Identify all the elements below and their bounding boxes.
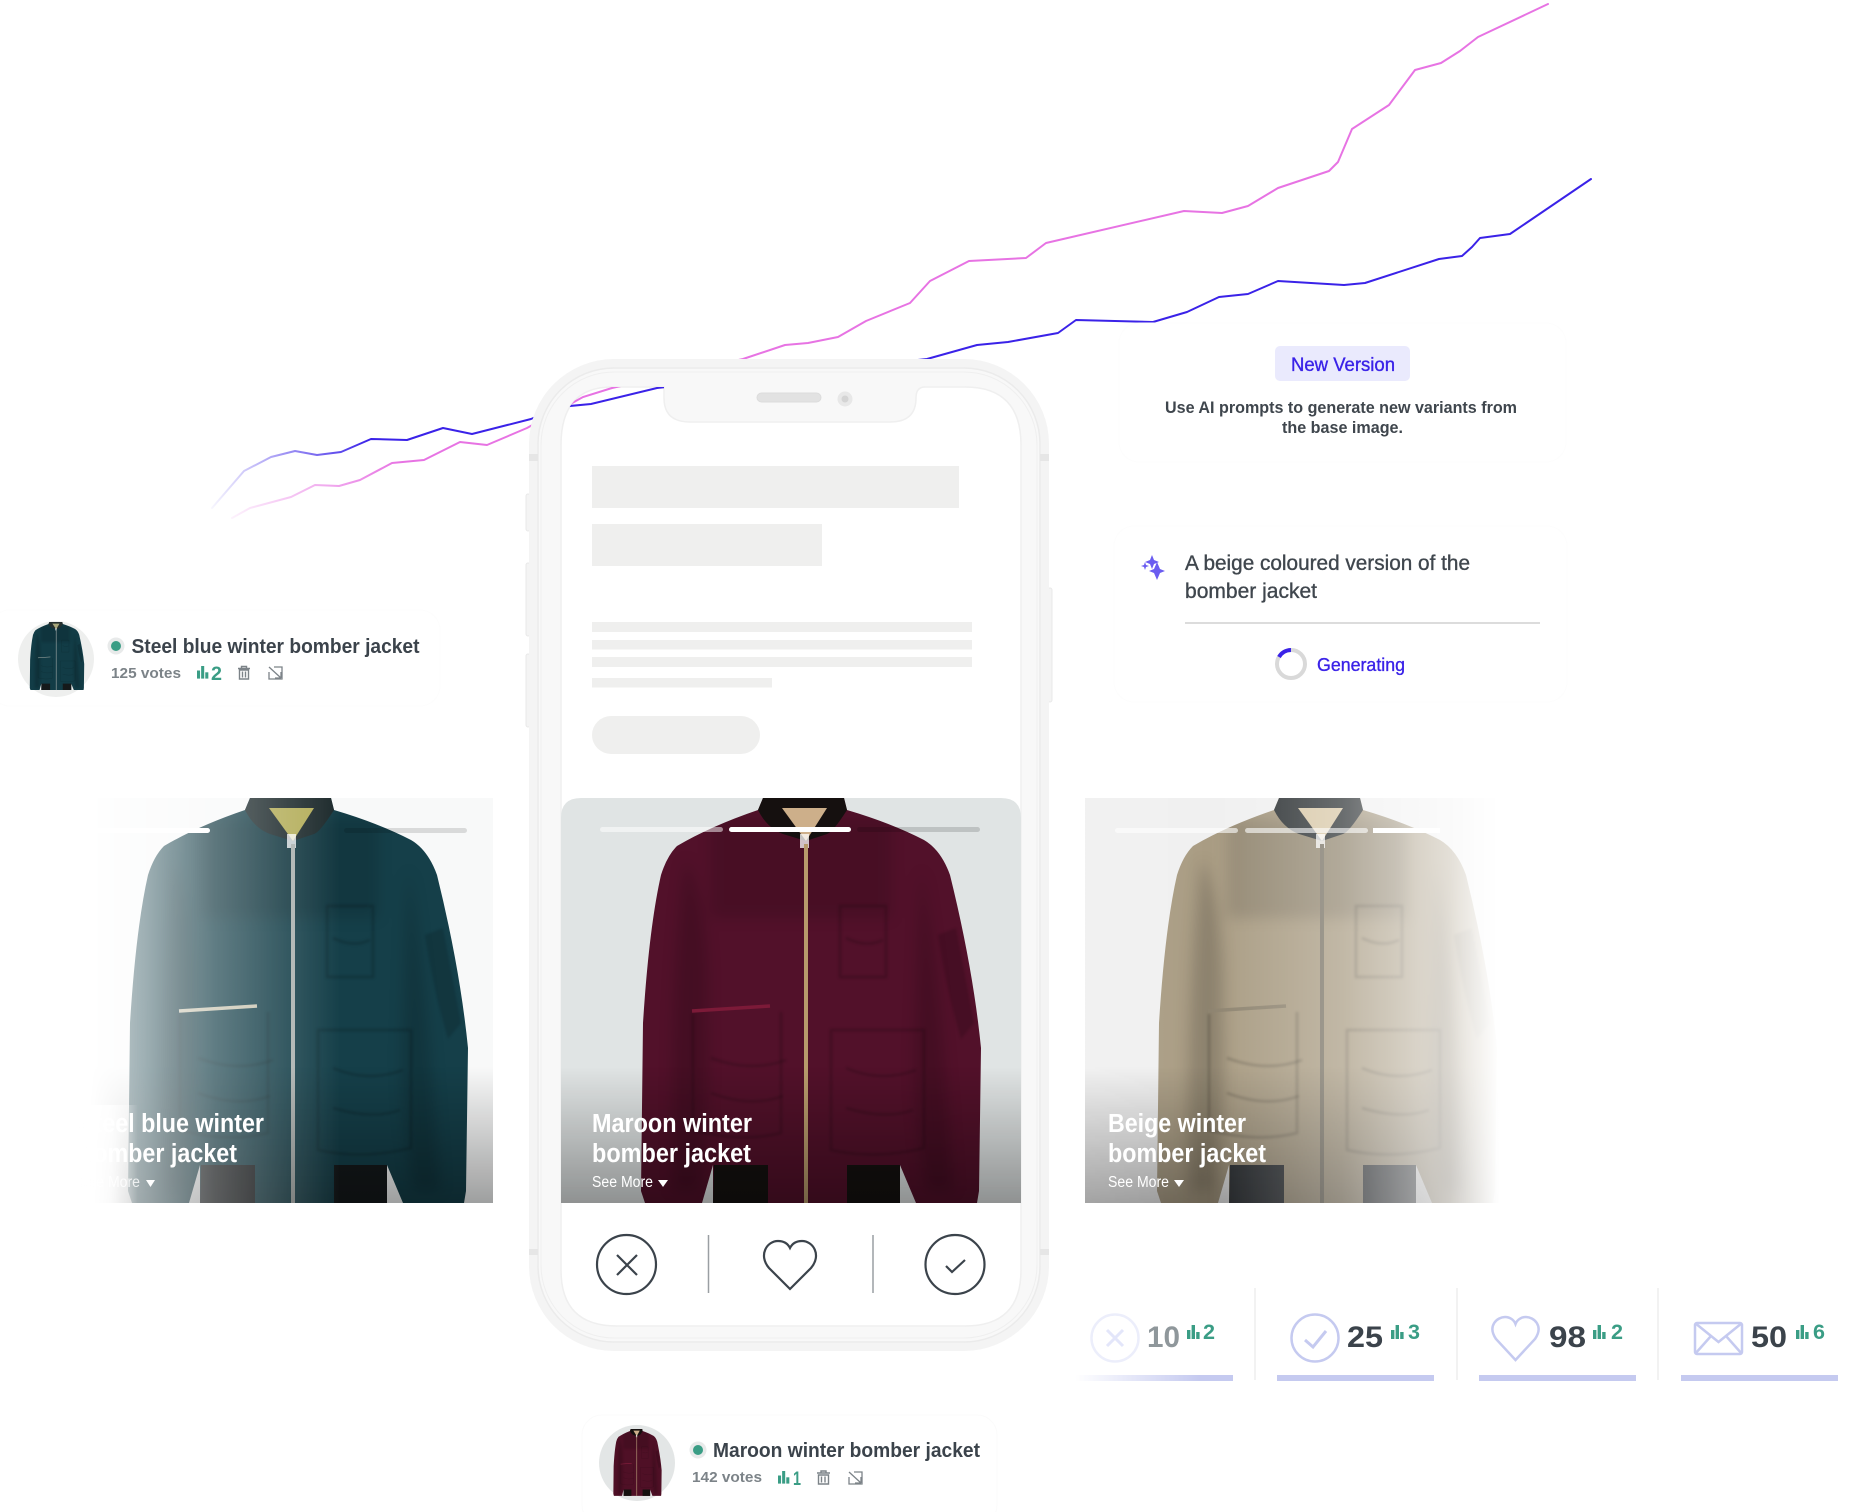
version title: Steel blue winter bomber jacket — [132, 636, 420, 658]
skeleton placeholder content — [592, 466, 972, 754]
stat: messages 50: 50 — [1751, 1321, 1787, 1354]
speaker and camera — [757, 392, 852, 406]
stat: accepted 25: 3 — [1408, 1321, 1420, 1344]
trend indicator — [778, 1469, 801, 1490]
trend lines seen through the screen corner — [570, 387, 664, 408]
action buttons — [597, 1235, 984, 1294]
phone mockup — [526, 359, 1052, 1351]
panel: steel blue jacket card — [114, 798, 493, 1203]
stat: liked 98: 2 — [1611, 1321, 1623, 1344]
icon: trash — [817, 1471, 830, 1484]
status dot — [690, 1442, 706, 1458]
jacket caption: See More — [592, 1174, 653, 1191]
panel: beige jacket card — [1085, 798, 1505, 1203]
jacket caption: bomber jacket — [592, 1140, 751, 1168]
jacket caption — [1108, 1110, 1266, 1191]
description text — [1165, 399, 1517, 437]
stat: accepted 25 — [1277, 1314, 1434, 1381]
jacket caption: Beige winter — [1108, 1110, 1246, 1138]
prompt text: A beige coloured version of the — [1185, 552, 1470, 575]
jacket caption: Steel blue winter — [79, 1110, 264, 1138]
stat: messages 50: 6 — [1813, 1321, 1825, 1344]
icon: loading spinner — [1277, 650, 1305, 678]
jacket caption: See More — [1108, 1174, 1169, 1191]
stat: rejected 10: 2 — [1203, 1321, 1215, 1344]
avatar: steel blue jacket — [18, 621, 94, 697]
panel: maroon version summary — [582, 1415, 997, 1512]
stat: liked 98 — [1479, 1317, 1636, 1381]
generating label: Generating — [1317, 655, 1405, 675]
vote count: 142 votes — [692, 1469, 762, 1486]
icon: expand — [269, 667, 282, 679]
trend indicator: 2 — [211, 664, 222, 685]
trend indicator — [197, 664, 222, 685]
jacket caption — [117, 1113, 264, 1187]
blue trend line — [212, 179, 1591, 508]
status dot — [108, 638, 124, 654]
panel: AI prompt card — [1114, 526, 1567, 702]
icon: sparkles — [1141, 555, 1165, 580]
jacket caption: bomber jacket — [79, 1140, 237, 1168]
avatar: maroon jacket — [599, 1425, 675, 1501]
stat: rejected 10 — [1075, 1314, 1233, 1381]
stat: liked 98: 98 — [1549, 1321, 1586, 1354]
line chart: two rising trend lines — [212, 4, 1591, 518]
panel: maroon jacket card — [561, 798, 1021, 1203]
icon: heart — [764, 1241, 816, 1289]
pink trend line — [232, 4, 1548, 518]
jacket caption: See More — [79, 1174, 140, 1191]
vote count: 125 votes — [111, 665, 181, 682]
stat: rejected 10: 10 — [1147, 1321, 1180, 1354]
jacket caption: bomber jacket — [1108, 1140, 1266, 1168]
description text: the base image. — [1282, 419, 1403, 437]
description text: Use AI prompts to generate new variants from — [1165, 399, 1517, 417]
jacket caption — [592, 1110, 752, 1191]
stat: accepted 25: 25 — [1347, 1321, 1383, 1354]
phone screen — [561, 387, 1021, 1326]
icon: expand — [849, 1472, 862, 1484]
side buttons — [526, 494, 1052, 727]
mask over caption fade — [40, 1105, 138, 1205]
trend indicator: 1 — [793, 1469, 801, 1490]
badge: New Version: New Version — [1291, 355, 1395, 376]
prompt text: bomber jacket — [1185, 580, 1317, 603]
panel: steel blue version summary — [0, 610, 440, 706]
icon: reject — [597, 1235, 656, 1294]
panel: engagement stats row — [1075, 1288, 1838, 1381]
panel: new version callout — [1119, 323, 1566, 462]
version title: Maroon winter bomber jacket — [713, 1440, 980, 1462]
prompt text — [1185, 552, 1470, 603]
jacket caption: Maroon winter — [592, 1110, 752, 1138]
icon: accept — [926, 1235, 984, 1294]
stat: messages 50 — [1681, 1321, 1838, 1381]
icon: trash — [238, 666, 250, 679]
badge: New Version — [1275, 346, 1410, 381]
